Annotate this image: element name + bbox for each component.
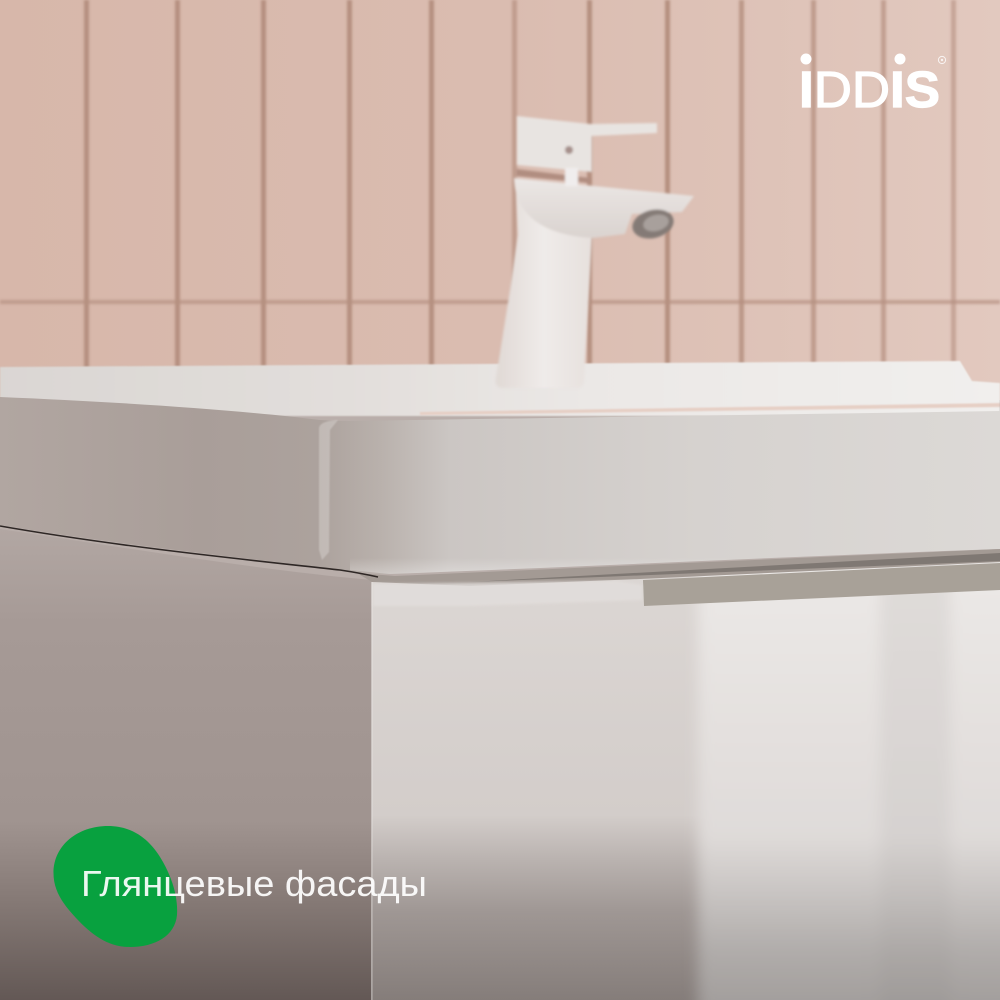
faucet aerator — [629, 205, 677, 243]
faucet — [496, 116, 694, 388]
cabinet side panel — [0, 529, 372, 1000]
green blob — [54, 826, 177, 947]
IDDIS logo: IDDIS — [799, 61, 940, 118]
faucet spout — [514, 178, 694, 238]
tiled pink wall — [0, 0, 1000, 400]
faucet body — [496, 190, 592, 388]
faucet gap — [516, 169, 590, 183]
faucet tab — [565, 168, 578, 186]
faucet screw — [565, 146, 573, 154]
gap and rail — [0, 526, 1000, 586]
washbasin corner highlight — [319, 420, 338, 560]
white door strip under rail — [373, 581, 642, 606]
door reflections — [698, 560, 1000, 1000]
washbasin front — [0, 397, 1000, 574]
door edge — [371, 582, 372, 1000]
cabinet glossy door — [372, 560, 1000, 1000]
washbasin top surface — [0, 361, 1000, 416]
faucet lever — [517, 116, 657, 172]
caption: Глянцевые фасады — [81, 863, 427, 904]
handle — [643, 563, 1000, 606]
